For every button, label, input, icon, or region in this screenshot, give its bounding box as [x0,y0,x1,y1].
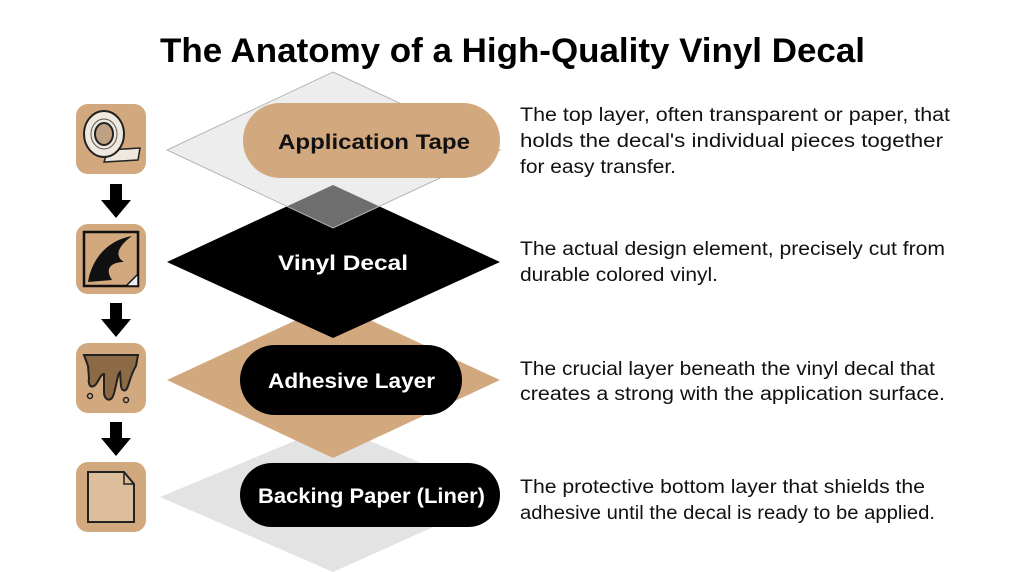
pill: Adhesive Layer: Adhesive Layer [268,370,435,393]
icon: vinyl decal sticker [76,224,146,294]
text block: application tape [520,105,951,178]
layer stack diagram [160,72,500,572]
icon: backing paper [76,462,146,532]
text block: adhesive layer: The crucial layer beneath the vinyl decal that [520,359,936,380]
pill: Adhesive Layer [240,345,462,415]
text block: vinyl decal: durable colored vinyl. [520,265,718,286]
text block: application tape: for easy transfer. [520,157,676,178]
pill: Application Tape [243,103,500,178]
text block: vinyl decal: The actual design element, precisely cut from [520,239,945,260]
text block: backing paper: The protective bottom layer that shields the [520,477,925,498]
pill: Backing Paper (Liner): Backing Paper (Liner) [258,485,485,508]
pill: Backing Paper (Liner) [240,463,500,527]
text block: application tape: holds the decal's individual pieces together [520,131,944,152]
layer: backing paper diamond [160,425,500,572]
text block: backing paper [520,477,935,524]
arrow [101,303,131,337]
text block: adhesive layer: creates a strong with the application surface. [520,384,945,405]
text block: application tape: The top layer, often transparent or paper, that [520,105,951,126]
layer: adhesive diamond [167,303,500,458]
arrow [101,422,131,456]
layer: application tape diamond [167,72,500,228]
text block: backing paper: adhesive until the decal is ready to be applied. [520,503,935,524]
label: Vinyl Decal: Vinyl Decal [278,252,408,275]
text block: adhesive layer [520,359,945,405]
text block: vinyl decal [520,239,945,286]
icon: tape roll [76,104,146,174]
title: The Anatomy of a High-Quality Vinyl Decal [160,32,865,70]
pill: Application Tape: Application Tape [278,131,470,154]
arrow [101,184,131,218]
icon: adhesive drip [76,343,146,413]
layer: vinyl decal diamond [167,185,500,338]
